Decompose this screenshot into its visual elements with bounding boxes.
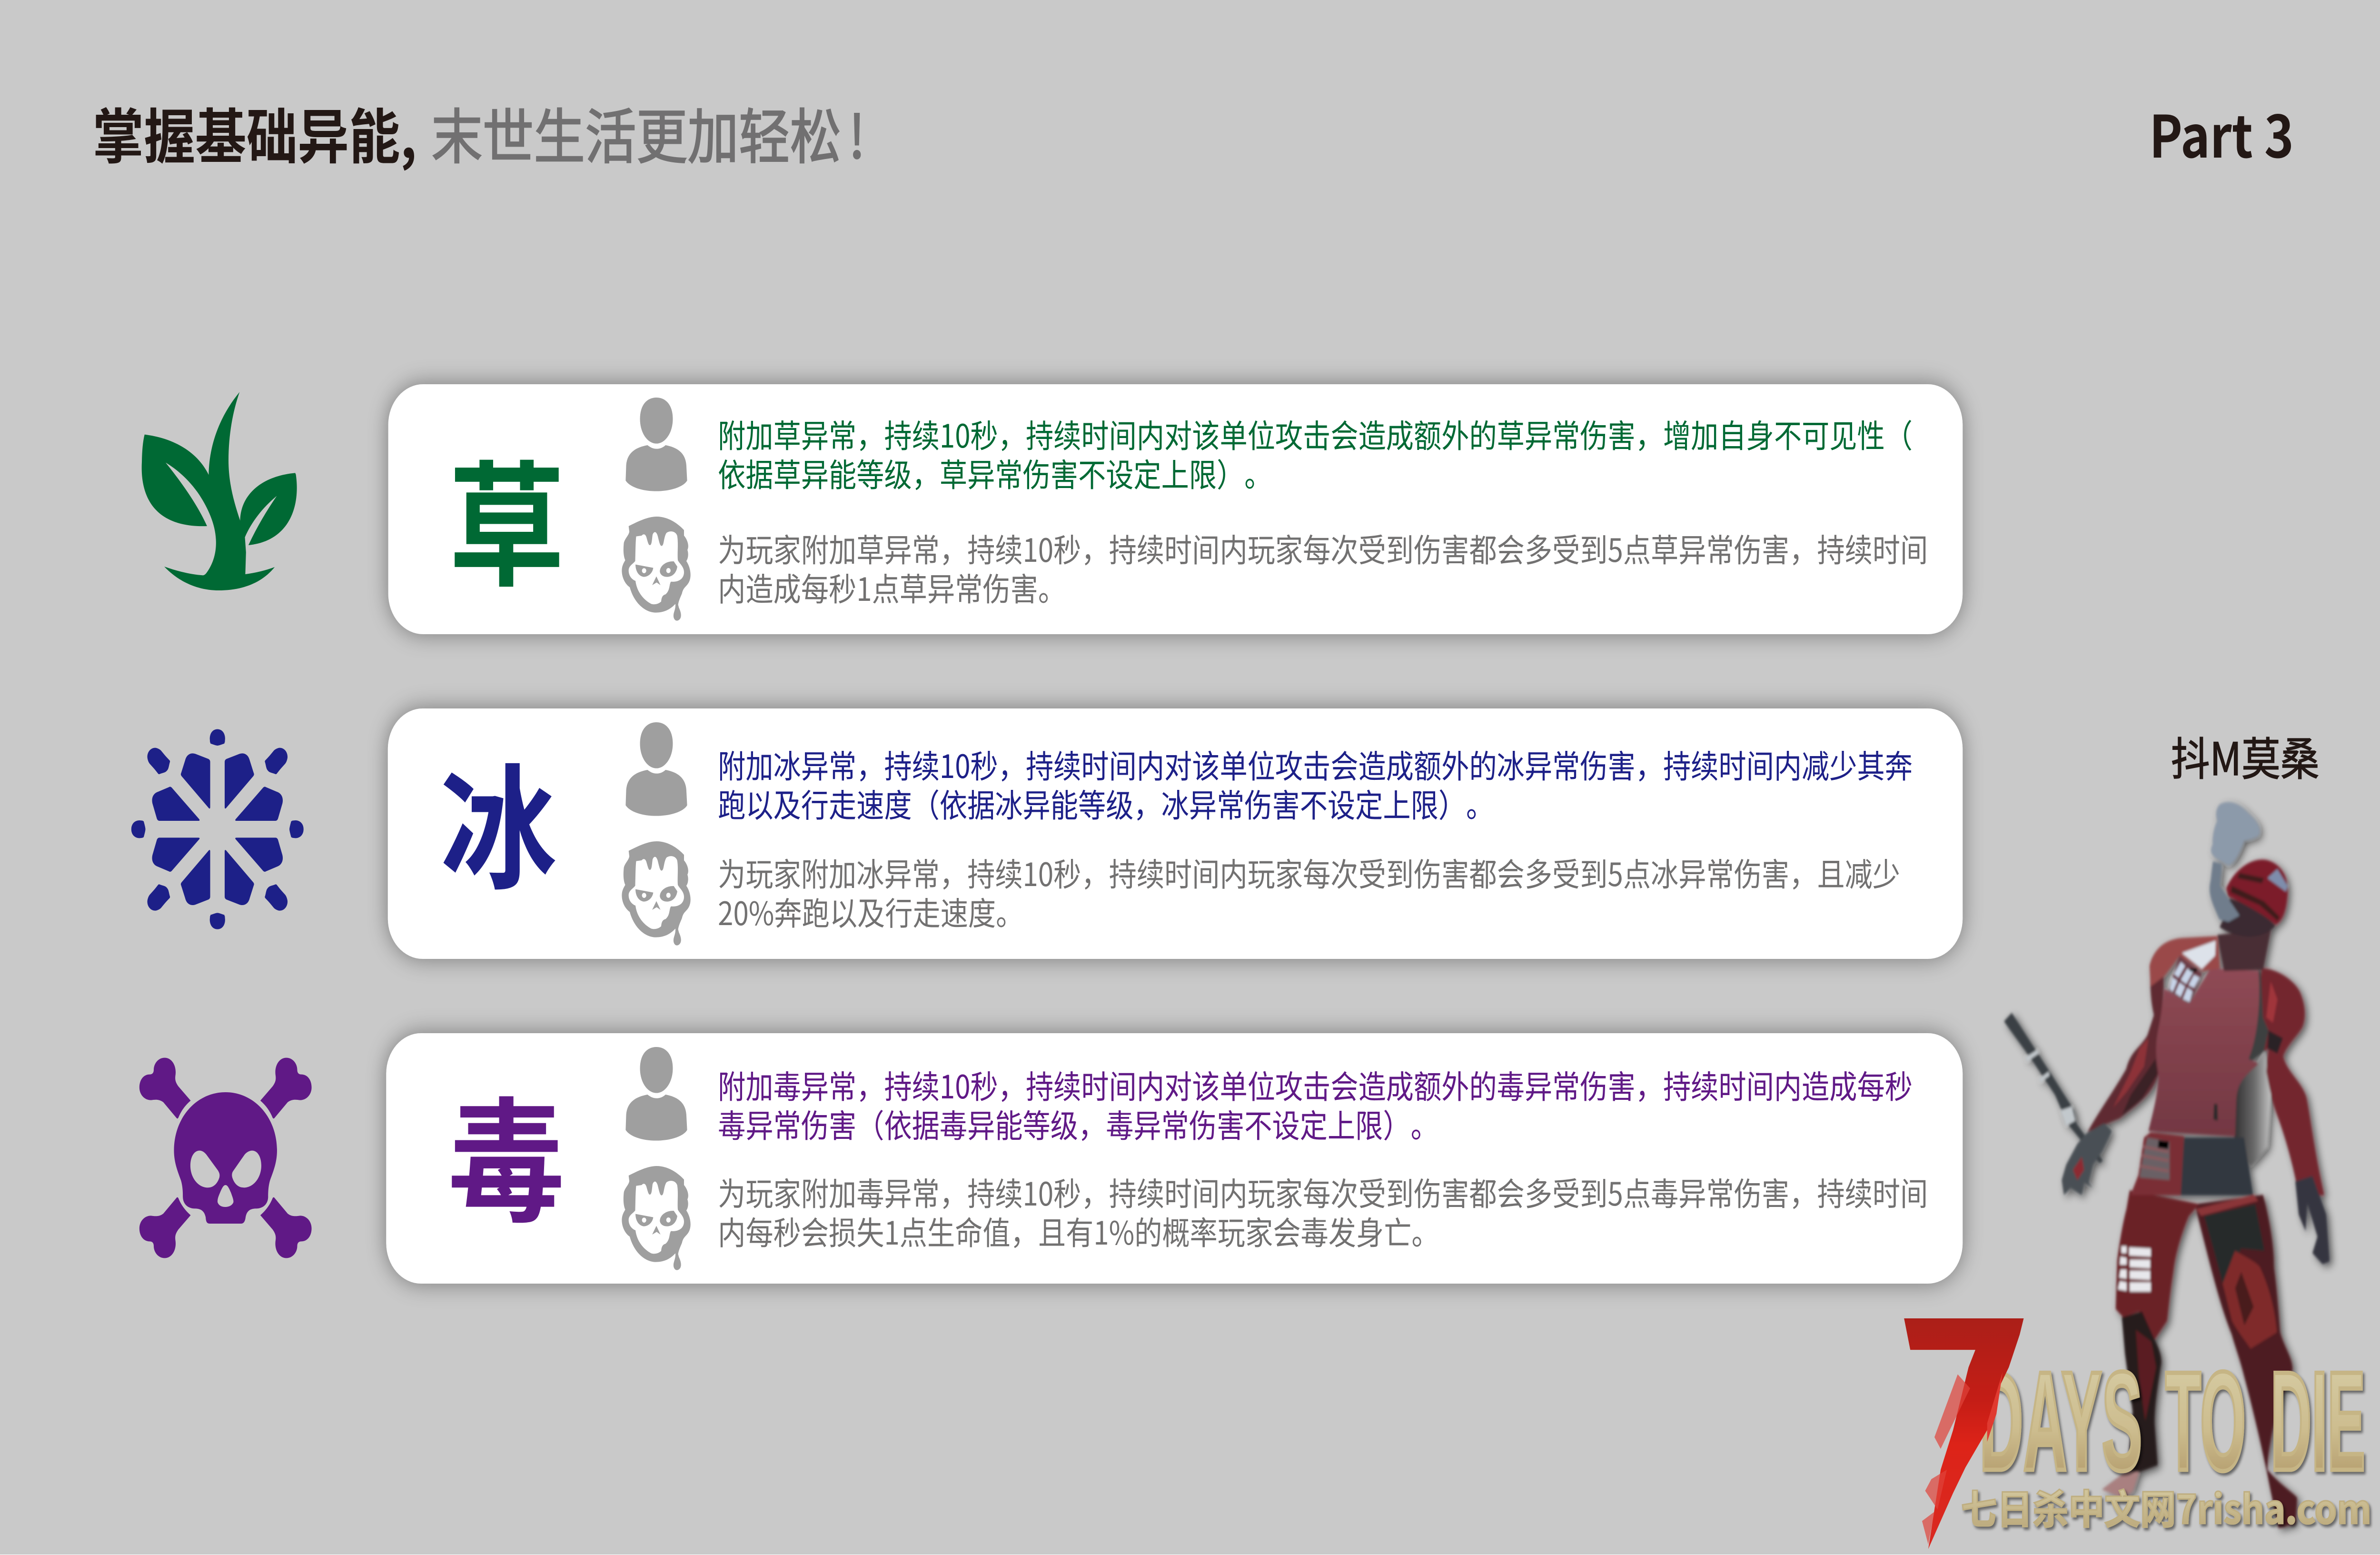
title: 末世生活更加轻松! (431, 89, 865, 175)
logo: 7 Days to Die: DAYS (1979, 1342, 2142, 1500)
title (93, 89, 865, 175)
text: poison zombie effect: 内每秒会损失1点生命值，且有1%的概率玩家会毒发身亡。 (718, 1208, 1439, 1254)
text: ice player effect: 附加冰异常，持续10秒，持续时间内对该单位攻击会造成额外的冰异常伤害，持续时间内减少其奔 (718, 741, 1913, 787)
text: grass zombie effect: 为玩家附加草异常，持续10秒，持续时间内玩家每次受到伤害都会多受到5点草异常伤害，持续时间 (718, 525, 1928, 571)
text: grass player effect (718, 411, 1913, 496)
text: grass player effect: 依据草异能等级，草异常伤害不设定上限）。 (718, 450, 1272, 496)
text: grass player effect: 附加草异常，持续10秒，持续时间内对该单位攻击会造成额外的草异常伤害，增加自身不可见性（ (718, 411, 1913, 457)
icon: snowflake (131, 729, 304, 929)
text: poison player effect: 附加毒异常，持续10秒，持续时间内对该单位攻击会造成额外的毒异常伤害，持续时间内造成每秒 (718, 1062, 1913, 1108)
title: 掌握基础异能, (93, 89, 417, 175)
text: ice zombie effect: 为玩家附加冰异常，持续10秒，持续时间内玩家每次受到伤害都会多受到5点冰异常伤害，且减少 (718, 849, 1900, 896)
text: poison zombie effect (718, 1169, 1928, 1254)
heading: ice: 冰 (440, 722, 556, 917)
heading: grass: 草 (448, 419, 565, 614)
icons: player and zombie, poison row (622, 1047, 691, 1270)
text: ice zombie effect (718, 849, 1900, 935)
logo numeral 7 (1904, 1318, 2023, 1549)
character name: 抖M莫桑 (2171, 723, 2320, 788)
part number: Part 3 (2149, 90, 2294, 174)
panel: poison (386, 1033, 1963, 1284)
panel: grass (388, 384, 1963, 634)
legs (2102, 1190, 2297, 1528)
icon: skull and crossbones (139, 1058, 312, 1258)
text: ice player effect (718, 741, 1913, 827)
panel: ice (388, 708, 1963, 959)
torso and arms (2004, 802, 2324, 1195)
heading: poison: 毒 (448, 1055, 565, 1251)
character figure (2004, 802, 2330, 1528)
text: ice player effect: 跑以及行走速度（依据冰异能等级，冰异常伤害不设定上限）。 (718, 780, 1494, 827)
text: poison player effect: 毒异常伤害（依据毒异能等级，毒异常伤害不设定上限）。 (718, 1101, 1438, 1147)
text: grass zombie effect (718, 525, 1928, 610)
icons: player and zombie, ice row (622, 722, 691, 946)
logo: 7 Days to Die (1904, 1318, 2371, 1549)
icon: plant (142, 392, 297, 590)
text: poison player effect (718, 1062, 1913, 1147)
text: grass zombie effect: 内造成每秒1点草异常伤害。 (718, 564, 1066, 610)
logo subtitle: 七日杀中文网7risha.com (1961, 1477, 2371, 1535)
icons: player and zombie, grass row (622, 398, 691, 621)
text: poison zombie effect: 为玩家附加毒异常，持续10秒，持续时间内玩家每次受到伤害都会多受到5点毒异常伤害，持续时间 (718, 1169, 1928, 1215)
logo: 7 Days to Die: TO (2165, 1342, 2246, 1500)
text: ice zombie effect: 20%奔跑以及行走速度。 (718, 888, 1023, 935)
